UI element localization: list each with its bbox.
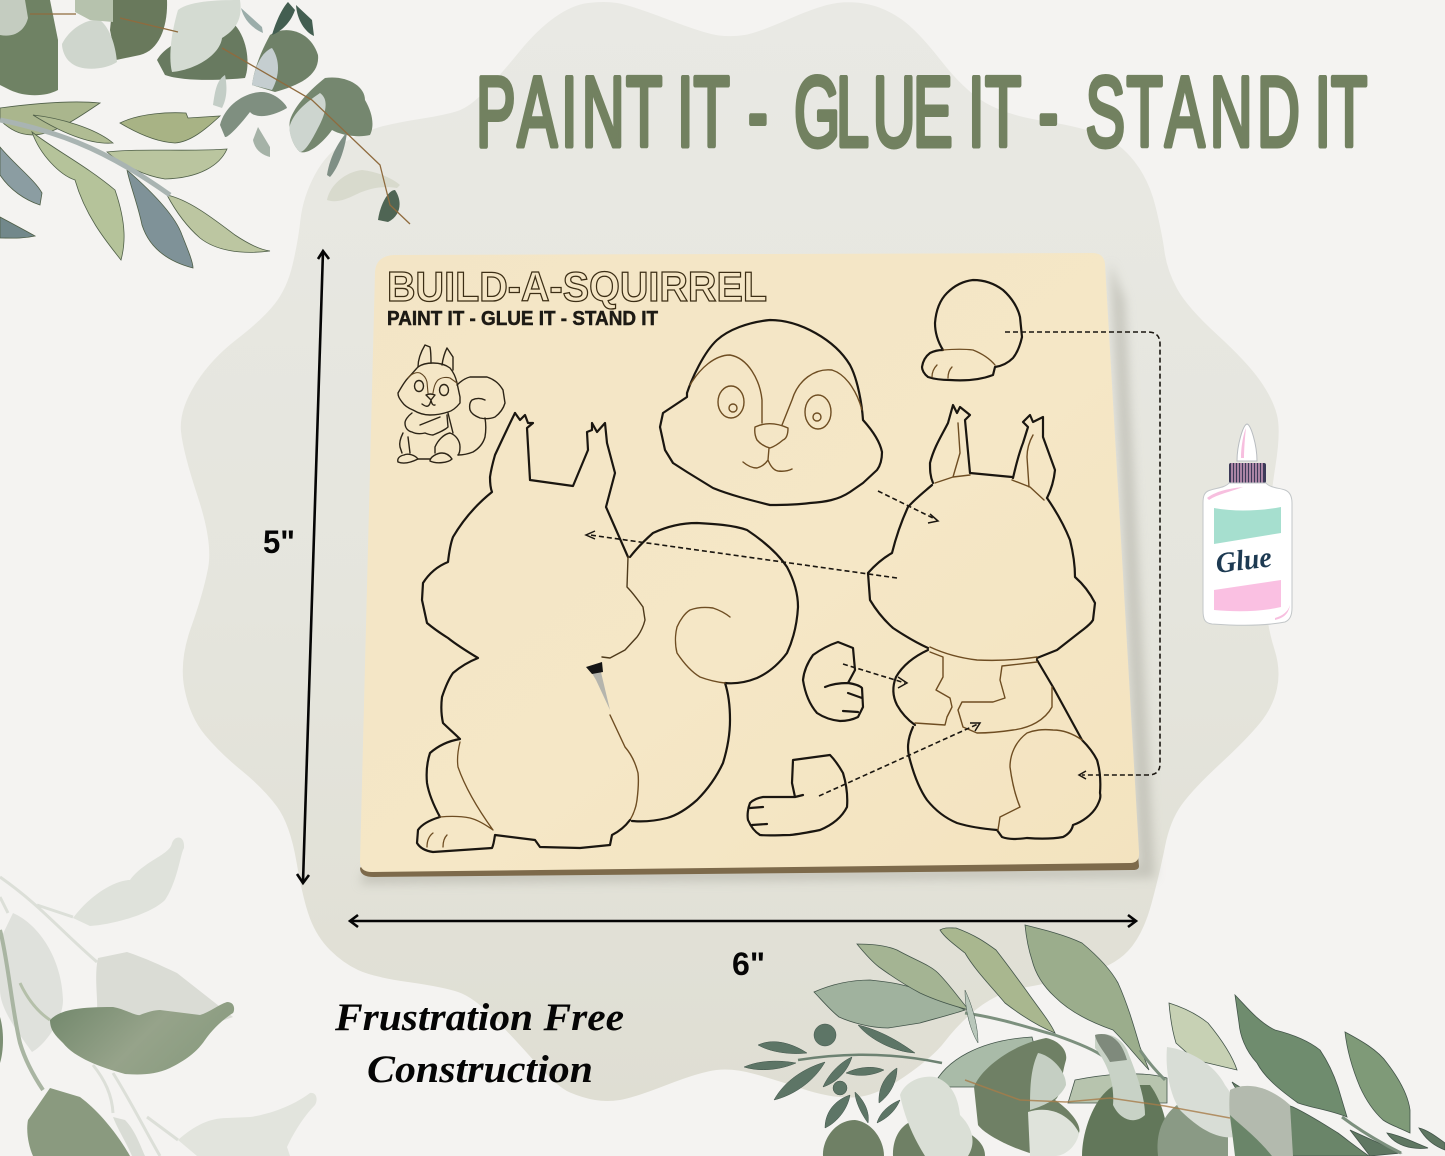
board title <box>387 263 767 330</box>
large leaves <box>933 1037 1045 1087</box>
long leaves <box>0 102 270 268</box>
wooden board <box>360 253 1160 884</box>
foliage: bottom left <box>0 838 317 1156</box>
caption: Construction <box>367 1048 593 1091</box>
arrowheads <box>586 514 1086 779</box>
loose arm piece <box>803 642 863 721</box>
width dimension arrow <box>350 915 1136 927</box>
foliage: bottom right <box>744 925 1445 1156</box>
assembly arrows <box>590 332 1160 796</box>
board title: PAINT IT - GLUE IT - STAND IT <box>387 308 658 330</box>
loose arm and paw piece <box>748 755 847 835</box>
assembled squirrel <box>868 405 1100 839</box>
height dimension arrow <box>297 251 329 883</box>
eucalyptus leaves <box>823 1120 884 1156</box>
board title: BUILD-A-SQUIRREL <box>387 263 767 310</box>
slit in board <box>586 662 610 710</box>
eucalyptus leaves <box>0 0 58 95</box>
icon: glue bottle: Glue <box>1214 541 1274 580</box>
caption <box>334 996 624 1091</box>
icon: glue bottle <box>1203 424 1292 625</box>
foliage: top left <box>0 0 410 268</box>
large body piece <box>417 413 798 852</box>
caption: Frustration Free <box>334 996 624 1039</box>
head piece <box>660 320 882 505</box>
title: PAINT IT - GLUE IT - STAND IT <box>476 57 1367 168</box>
shoulder piece <box>922 280 1022 380</box>
height label: 5" <box>263 524 295 560</box>
mini squirrel reference <box>398 345 505 463</box>
width label: 6" <box>732 946 765 982</box>
wavy backdrop shape <box>181 2 1279 1101</box>
sprig <box>744 990 978 1128</box>
